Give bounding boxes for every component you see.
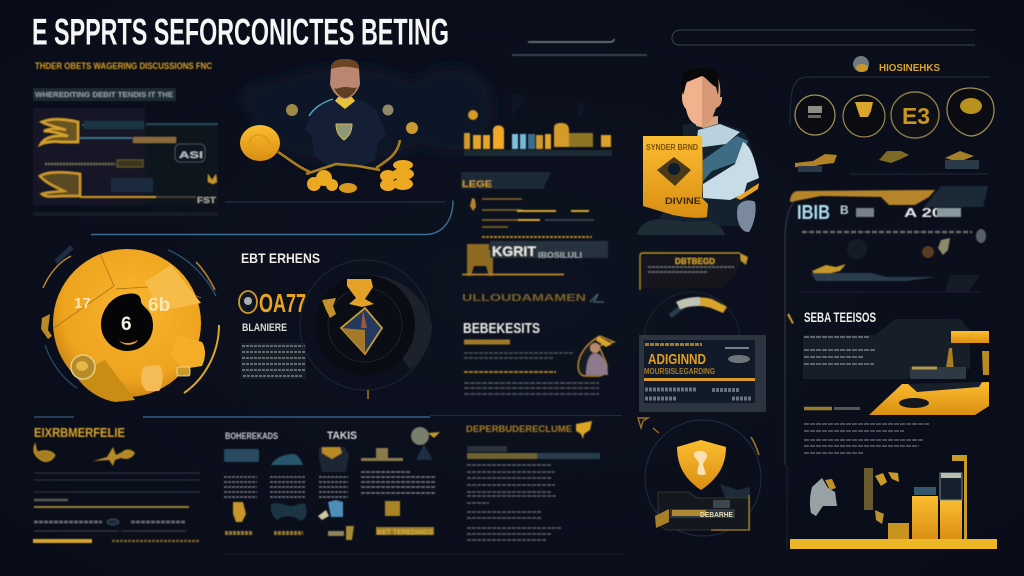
wheel lower shade <box>75 360 135 402</box>
arc top <box>670 304 686 316</box>
wheel label right: 6b <box>148 295 170 316</box>
panel: right lower section <box>787 309 989 550</box>
slate wedge <box>720 484 750 505</box>
book diamond <box>657 157 691 186</box>
label A value: A 20 <box>904 205 942 220</box>
header slate <box>924 186 988 207</box>
wrist <box>737 200 756 232</box>
panel: bottom left summary <box>33 425 200 543</box>
card gold strip <box>645 343 702 346</box>
card row <box>645 388 740 392</box>
gold flag <box>655 509 669 528</box>
ring outline <box>644 292 740 388</box>
jersey collar <box>335 97 355 109</box>
header shape <box>790 190 935 205</box>
panel: top right category medallions <box>672 30 994 174</box>
wheel highlight <box>145 265 201 311</box>
shadow figure <box>847 239 867 259</box>
grey bar <box>34 530 186 532</box>
small gold pin <box>787 313 794 324</box>
icon: gold figure <box>864 468 873 510</box>
gold banner: BET TEREDINGS <box>377 528 433 536</box>
medallion 2 <box>843 95 885 137</box>
slate panel <box>803 319 970 379</box>
small gold icon <box>208 174 217 184</box>
benefits gold strip <box>464 340 510 344</box>
benefits body <box>464 383 599 394</box>
shirt white panel <box>703 142 759 200</box>
gold tick left <box>638 418 659 433</box>
card gold text <box>672 510 706 516</box>
card subhead: MOURSISLEGARDING <box>644 367 715 376</box>
bar 2 cap <box>914 487 936 495</box>
chart: gold bar chart <box>790 455 997 549</box>
sub-heading strip <box>33 88 176 101</box>
card headline: ADIGINND <box>648 351 706 368</box>
grey underline <box>156 196 196 198</box>
card gold rule <box>644 378 755 381</box>
small tag <box>713 500 730 508</box>
tray <box>910 367 966 379</box>
frame shadow panel <box>642 256 744 288</box>
bar 2 <box>912 496 938 540</box>
radial gauge <box>300 260 432 399</box>
icon: gold swirl two <box>40 172 80 196</box>
value box <box>175 144 205 162</box>
shirt light collar <box>696 124 740 148</box>
gold progress <box>517 211 589 220</box>
icon: gold bag top <box>322 447 342 459</box>
small clip icon <box>177 367 190 376</box>
face <box>682 74 722 126</box>
grey progress <box>545 219 594 221</box>
small teal tick <box>590 294 604 302</box>
rule <box>802 291 982 293</box>
value box: ASI <box>179 150 203 160</box>
arrow: blue connector curve <box>91 200 453 234</box>
bottom card <box>658 492 750 530</box>
dice cube large <box>170 335 205 369</box>
title: E SPPRTS SEFORCONICTES BETING <box>32 12 449 52</box>
odds figures: OA77 <box>259 288 306 318</box>
headline text: KGRIT <box>492 243 536 259</box>
label grey <box>328 531 344 536</box>
small round icon <box>976 229 986 243</box>
panel: admin score card <box>639 335 766 412</box>
body text <box>804 424 929 453</box>
heading: wagering: THDER OBETS WAGERING DISCUSSIONS FNC <box>35 61 212 71</box>
bar 1 <box>888 523 909 540</box>
wheel hole <box>101 293 153 351</box>
gold arc tick <box>751 437 759 455</box>
medallion 4 <box>947 88 994 136</box>
coin highlight <box>250 135 270 146</box>
wheel disc <box>53 249 201 397</box>
top accent <box>528 39 614 42</box>
gold rule <box>462 274 564 276</box>
jersey blue accent <box>309 99 333 116</box>
icon: jersey <box>328 500 343 517</box>
row three gold tag <box>117 160 143 167</box>
grey caption <box>834 407 860 410</box>
ring <box>645 420 761 536</box>
hole glyph: 6 <box>121 314 132 335</box>
bar 3 top <box>940 473 962 500</box>
bullet lines <box>482 199 532 227</box>
hair <box>681 68 719 95</box>
gold text rule <box>482 236 592 238</box>
grey lines <box>648 267 734 272</box>
arc white <box>676 297 700 309</box>
small value: FST <box>197 196 216 205</box>
label gold icon <box>346 526 354 540</box>
label tab <box>461 172 551 189</box>
heading: DEPERBUDERECLUME <box>466 424 572 435</box>
rule left <box>34 416 74 418</box>
icon: gold slab <box>385 501 400 516</box>
gold tag <box>912 366 937 370</box>
arc gold <box>676 297 727 313</box>
gold bar <box>33 539 92 543</box>
headline strip <box>490 241 608 258</box>
medallion 1 <box>795 95 835 135</box>
heading: EIXRBMERFELIE <box>34 425 125 440</box>
panel: bottom article <box>466 421 600 540</box>
heading: EBT ERHENS <box>241 250 320 266</box>
gold pile centre <box>339 183 357 193</box>
icon: cap <box>271 454 303 465</box>
list panel extension <box>145 125 218 205</box>
frame <box>785 200 795 465</box>
wheel segment dividers <box>54 254 201 328</box>
gold corner <box>740 253 748 265</box>
rule main <box>143 416 430 418</box>
list panel <box>33 108 145 205</box>
sleeve dark <box>737 190 757 202</box>
gold tendrils <box>278 140 400 174</box>
card row two <box>645 396 752 400</box>
icon: gold medal <box>34 444 55 462</box>
gold slab <box>869 382 989 415</box>
book label: DIVINE <box>665 196 701 206</box>
medallion 3 <box>891 92 939 138</box>
illustration: world map backdrop <box>240 65 495 165</box>
card strip <box>670 509 735 518</box>
rule bottom <box>224 553 624 555</box>
shirt blue panel <box>703 136 748 181</box>
panel: best betting stats <box>239 250 432 399</box>
gold trophy <box>347 279 374 307</box>
base rule <box>850 173 988 175</box>
frame <box>640 253 740 290</box>
gold emblem <box>467 244 493 276</box>
figure base <box>811 273 936 281</box>
gold underline <box>80 196 156 198</box>
labels gold <box>225 531 303 535</box>
small car icon <box>725 348 750 363</box>
panel: center gold bracket <box>640 253 748 388</box>
globe icon <box>853 56 869 72</box>
right shoulder badge <box>382 104 394 116</box>
row three label <box>45 163 115 165</box>
caption line <box>802 231 972 233</box>
bar base <box>464 150 612 156</box>
panel: right table header <box>785 186 988 465</box>
slab dark inlay <box>908 382 982 392</box>
row two bar <box>80 137 132 139</box>
small gold bracket <box>946 348 954 372</box>
stat row <box>34 520 186 524</box>
gold figure foot <box>875 510 884 524</box>
panel: person with gold guide book <box>637 68 759 235</box>
section heading dim: ULLOUDAMAMEN <box>462 293 586 304</box>
figure: portrait pin <box>578 336 614 376</box>
desk <box>637 219 725 235</box>
section divider lines <box>34 416 624 554</box>
divider <box>512 54 647 56</box>
neck <box>696 116 718 128</box>
bar 3 <box>940 500 962 540</box>
icon: ribbon <box>810 478 837 516</box>
panel text lines <box>804 337 876 364</box>
odds logo ring <box>239 291 257 313</box>
text columns <box>224 477 348 497</box>
small grey label <box>34 499 68 501</box>
label tag right <box>937 208 961 217</box>
gold key icon <box>470 198 476 211</box>
medal <box>71 355 95 379</box>
bottom panel line <box>33 212 218 216</box>
rule right <box>430 414 622 416</box>
outer arc segments <box>43 247 219 393</box>
wheel left icon <box>41 314 52 339</box>
jersey crest <box>336 124 352 140</box>
big gold coin <box>240 125 280 161</box>
left shoulder badge <box>286 104 298 116</box>
medallion 3: E3 <box>902 103 930 129</box>
gold caption <box>804 407 832 410</box>
hole smile <box>119 340 138 345</box>
gold trophy 3 <box>945 151 979 169</box>
gold figure hand <box>875 472 899 486</box>
icon: gold hand <box>233 502 246 522</box>
label B: B <box>840 203 849 217</box>
icon: mask <box>271 503 307 521</box>
body lines <box>467 465 562 540</box>
card inner <box>644 340 755 403</box>
heading: DBTBEGD <box>675 257 715 266</box>
strip text <box>467 453 537 459</box>
player beard <box>334 87 357 98</box>
person torso <box>659 121 759 226</box>
slab oval <box>899 398 929 408</box>
panel: bottom centre teams grid <box>224 427 440 540</box>
icon: gold bag <box>319 447 349 472</box>
icon: gold swirl one <box>41 119 78 144</box>
book heading: SYNDER BRND <box>646 143 698 152</box>
icon: gold bag <box>576 421 592 439</box>
gold side icon <box>322 298 336 318</box>
row two gold tag <box>133 137 176 143</box>
player body <box>305 98 386 166</box>
player hair <box>331 59 359 69</box>
card <box>639 335 766 412</box>
dice cube small <box>141 365 163 391</box>
gold frame <box>711 495 749 530</box>
sub-heading strip: WHEREDITING DEBIT TENDIS IT THE <box>35 90 173 99</box>
ribbon gold tip <box>825 479 836 490</box>
panel: top centre bar strip <box>464 39 647 156</box>
base glow line <box>225 201 445 203</box>
panel: shield ring <box>638 418 761 536</box>
small coin <box>406 122 418 134</box>
row one bars <box>82 124 218 125</box>
vertical rule <box>786 465 788 550</box>
stat pill <box>107 519 119 525</box>
shield <box>677 440 726 490</box>
row four box <box>111 178 153 192</box>
gold coin <box>468 110 478 120</box>
panel: centre article with labels <box>461 172 614 394</box>
map silhouette <box>512 92 586 120</box>
gold caption <box>112 540 200 542</box>
gold block <box>951 331 989 343</box>
heading: SEBA TEEISOS <box>804 309 876 325</box>
label tag <box>856 208 874 217</box>
pill outline <box>672 30 975 45</box>
slate footer <box>945 275 980 291</box>
gold coin stack <box>380 160 414 191</box>
gold glove <box>938 238 950 255</box>
strip <box>467 446 507 452</box>
sub heading: BLANIERE <box>242 322 287 334</box>
face shade <box>702 75 722 127</box>
icon: device <box>224 449 259 462</box>
bars <box>464 123 611 149</box>
benefits heading: BEBEKESITS <box>463 320 540 337</box>
heading: HIOSINEHKS <box>879 63 940 74</box>
icon: gold hat <box>361 448 403 461</box>
chart: gold pie wheel <box>41 247 219 402</box>
shirt sleeve band <box>736 183 759 200</box>
row one label <box>84 121 144 129</box>
dim coin <box>922 246 934 258</box>
text column wide <box>361 472 435 493</box>
icon: helmet <box>411 427 440 460</box>
gold figure <box>812 264 846 278</box>
text block <box>241 343 306 379</box>
icon: gold glove <box>318 510 329 520</box>
gold trophy 2 <box>879 151 909 163</box>
icon: gold plane <box>93 447 135 466</box>
shield highlight <box>694 451 707 475</box>
gold trophy 1 <box>795 154 837 172</box>
benefits gold line <box>464 371 556 373</box>
benefits lines <box>464 353 574 358</box>
label large: IBIB <box>797 202 830 224</box>
headline subtext: IBOSILULI <box>538 251 582 260</box>
gold progress <box>34 506 189 508</box>
illustration: esports player with coins <box>225 59 445 202</box>
heading right: TAKIS <box>327 430 357 442</box>
panel: top left wagering list <box>33 61 218 216</box>
chart base <box>790 539 997 549</box>
bar 4 <box>952 455 967 540</box>
bar 3 cap <box>941 473 961 478</box>
strip end <box>537 453 600 459</box>
tab text: LEGE <box>462 179 492 189</box>
ruled lines <box>34 473 200 492</box>
wheel label left: 17 <box>74 295 91 312</box>
card label: DEBARHE <box>700 512 733 519</box>
player head <box>330 59 360 99</box>
heading left: BOHEREKADS <box>225 431 278 441</box>
frame <box>790 77 990 125</box>
guide book <box>643 136 708 218</box>
gold pile left <box>307 170 338 191</box>
gold right column <box>982 351 989 375</box>
